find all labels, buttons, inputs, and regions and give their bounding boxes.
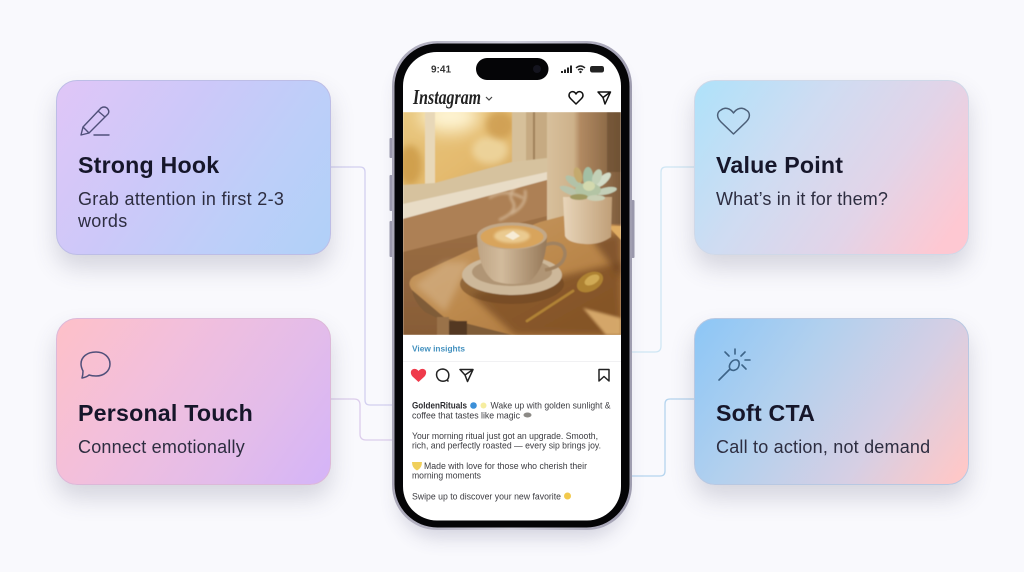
table bbox=[409, 216, 621, 335]
panel: strong hook bbox=[56, 80, 330, 254]
icon: heart bbox=[716, 108, 750, 135]
window panes bbox=[403, 112, 513, 190]
pot and succulent bbox=[563, 197, 612, 244]
phone mockup bbox=[390, 41, 634, 544]
cup handle bbox=[545, 243, 565, 270]
side buttons bbox=[390, 138, 634, 258]
curtain bbox=[547, 112, 621, 224]
post caption bbox=[412, 400, 610, 502]
status icons bbox=[561, 66, 604, 73]
coffee bbox=[480, 226, 544, 248]
post caption: morning moments bbox=[412, 470, 481, 480]
description: words bbox=[78, 210, 128, 230]
post caption: Your morning ritual just got an upgrade. Smooth, bbox=[412, 431, 598, 441]
post caption: rich, and perfectly roasted — every sip brings joy. bbox=[412, 440, 601, 450]
icon: header heart bbox=[569, 92, 583, 104]
description bbox=[78, 188, 284, 230]
icon: share bbox=[460, 370, 473, 382]
heading: Soft CTA bbox=[716, 400, 815, 426]
icon: pencil bbox=[80, 106, 110, 136]
icon: magic wand bbox=[718, 348, 751, 381]
post caption: GoldenRituals bbox=[412, 400, 467, 410]
panel: personal touch bbox=[56, 318, 330, 484]
status time: 9:41 bbox=[431, 64, 451, 76]
view insights link: View insights bbox=[412, 344, 465, 354]
instagram wordmark: Instagram bbox=[412, 85, 481, 109]
icon: bookmark bbox=[599, 370, 609, 381]
steam bbox=[489, 184, 525, 220]
post caption: Swipe up to discover your new favorite bbox=[412, 492, 561, 502]
panel: soft cta bbox=[694, 318, 968, 484]
icon: liked heart bbox=[411, 369, 426, 382]
saucer bbox=[460, 278, 564, 304]
description: What’s in it for them? bbox=[716, 188, 888, 208]
icon: speech bubble bbox=[80, 351, 111, 379]
icon: header send bbox=[598, 92, 610, 104]
dynamic island bbox=[476, 58, 548, 80]
chevron bbox=[486, 97, 492, 100]
phone frame bbox=[392, 41, 632, 530]
spoon bbox=[527, 291, 573, 321]
icon: comment bbox=[437, 369, 449, 382]
window frame bbox=[425, 112, 435, 187]
heading: Personal Touch bbox=[78, 400, 253, 426]
post photo: coffee cup by the window bbox=[398, 100, 621, 335]
heading: Strong Hook bbox=[78, 152, 219, 178]
panel: value point bbox=[694, 80, 968, 254]
heading: Value Point bbox=[716, 152, 843, 178]
description: Grab attention in first 2-3 bbox=[78, 188, 284, 208]
cup bbox=[477, 236, 547, 284]
description: Connect emotionally bbox=[78, 436, 245, 456]
description: Call to action, not demand bbox=[716, 436, 930, 456]
phone shadow bbox=[398, 60, 626, 538]
post caption: coffee that tastes like magic bbox=[412, 410, 520, 420]
post caption: Made with love for those who cherish their bbox=[424, 461, 587, 471]
post caption: Wake up with golden sunlight & bbox=[490, 400, 610, 410]
phone screen bbox=[403, 52, 621, 520]
